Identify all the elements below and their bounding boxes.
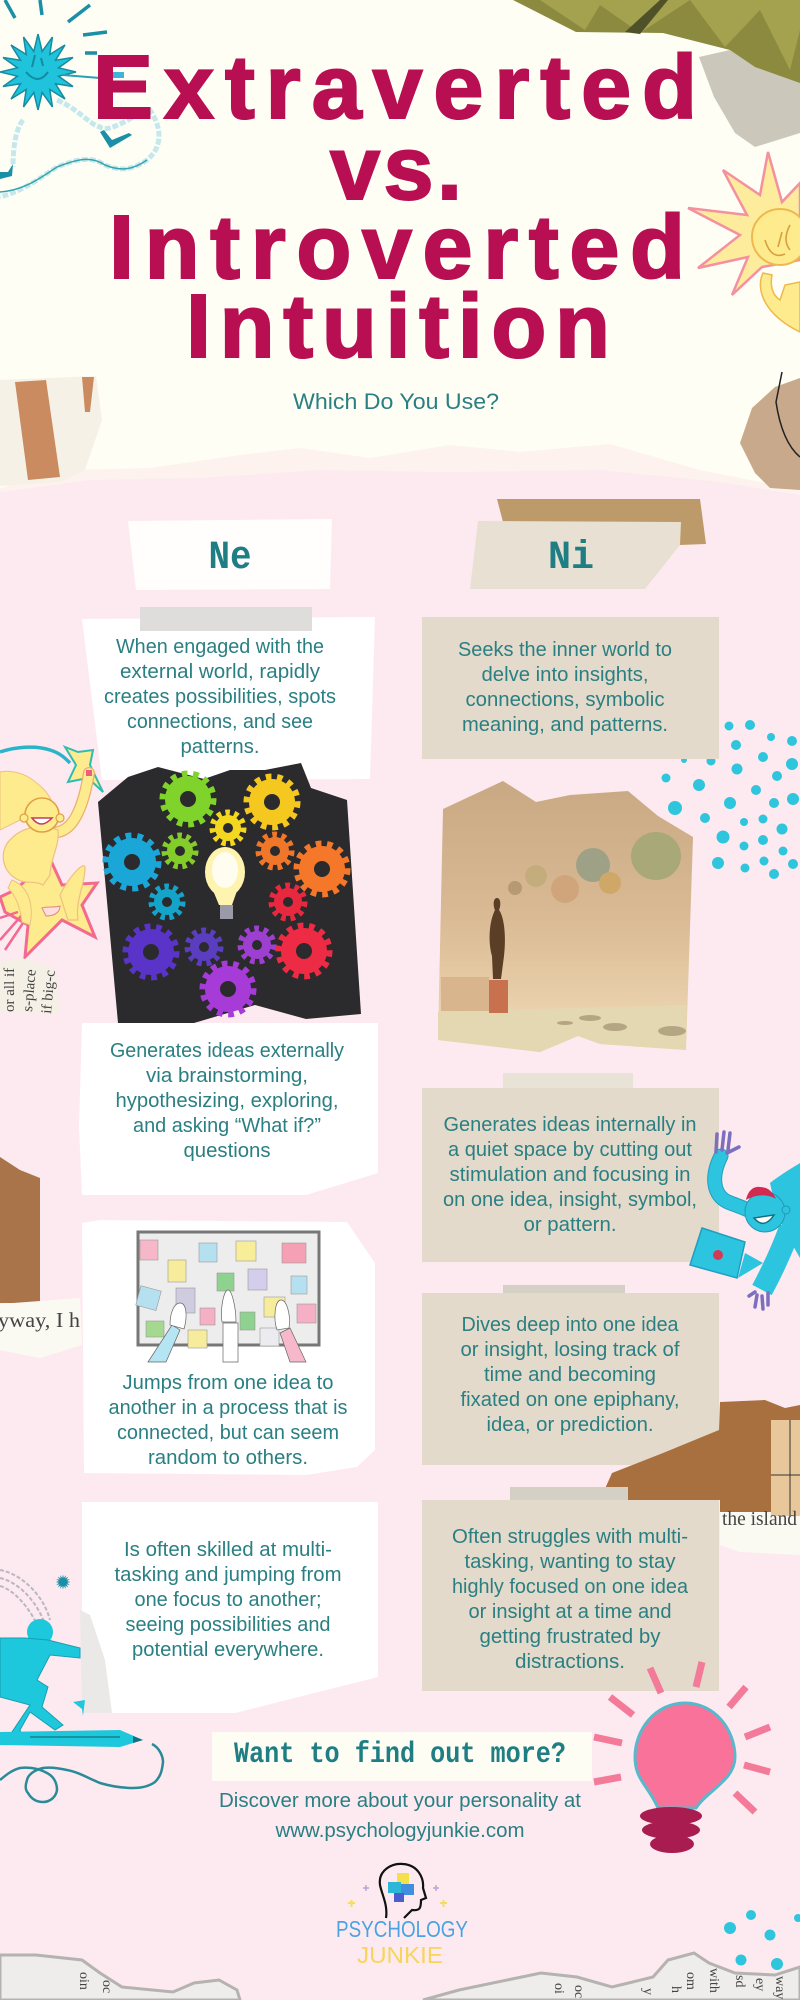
panel: Ni description 4: Often struggles with multi- — [452, 1526, 688, 1548]
panel: Ni description 2: on one idea, insight, symbol, — [443, 1189, 697, 1211]
panel: Ne description 3 with whiteboard: random to others. — [148, 1447, 308, 1469]
panel: Ne description 4: seeing possibilities and — [126, 1614, 330, 1636]
panel: Ne description 4: tasking and jumping from — [114, 1564, 342, 1586]
panel: Ni description 2: a quiet space by cutting out — [448, 1139, 692, 1161]
panel: Ne description 1 — [82, 607, 375, 780]
collage: brown torn paper with newspaper scrap, left — [0, 1157, 82, 1358]
panel: Ne description 4: Is often skilled at multi- — [124, 1539, 332, 1561]
collage: torn newspaper strip, bottom: oin — [76, 1972, 91, 1990]
title: Introverted — [109, 198, 685, 298]
title: vs. — [330, 119, 462, 219]
illustration: whiteboard with sticky notes and hands — [136, 1232, 319, 1362]
title: Intuition — [186, 277, 610, 377]
panel: Ni description 1: Seeks the inner world to — [458, 639, 672, 661]
call to action box — [212, 1732, 592, 1781]
logo: Psychology Junkie: PSYCHOLOGY — [336, 1916, 468, 1942]
panel: Ne description 2: Generates ideas externally — [110, 1040, 344, 1062]
collage: brown crumpled paper with line doodle, right — [740, 372, 800, 490]
panel: Ne description 4: one focus to another; — [134, 1589, 322, 1611]
panel: Ne description 3 with whiteboard — [82, 1220, 375, 1475]
panel: Ne description 1: patterns. — [180, 736, 260, 758]
call to action text: Discover more about your personality at — [219, 1790, 581, 1812]
panel: Ni description 3: idea, or prediction. — [486, 1414, 654, 1436]
panel: Ni description 4: or insight at a time and — [468, 1601, 672, 1623]
panel: Ni description 4: highly focused on one idea — [452, 1576, 689, 1598]
collage: brown torn paper with map and newspaper scrap, right — [600, 1400, 800, 1555]
panel: Ni description 1: meaning, and patterns. — [462, 714, 668, 736]
collage: mountain and grey torn paper, top right — [513, 0, 800, 147]
collage: torn paper with brown tape, left — [0, 376, 102, 486]
collage: torn newspaper strip, bottom: with — [706, 1968, 721, 1993]
title: Extraverted — [93, 38, 697, 138]
panel: Ni description 3: fixated on one epiphany, — [460, 1389, 680, 1411]
call to action text: www.psychologyjunkie.com — [274, 1820, 524, 1842]
panel: Ni description 3 — [422, 1285, 719, 1465]
heading tag: Ni with tape: Ni — [548, 536, 594, 581]
panel: Ni description 2: stimulation and focusing in — [450, 1164, 690, 1186]
title — [93, 38, 697, 377]
image: person with floating thought spheres — [438, 781, 693, 1052]
collage: torn newspaper strip, bottom: oc — [99, 1980, 114, 1993]
subtitle: Which Do You Use? — [293, 389, 499, 414]
header background: cream torn paper — [0, 0, 800, 500]
panel: Ni description 4: tasking, wanting to stay — [464, 1551, 676, 1573]
collage: torn newspaper strip, bottom: oc — [571, 1985, 586, 1998]
dots: blue confetti, bottom right — [724, 1910, 800, 1970]
collage: torn newspaper strip, bottom: sd — [732, 1975, 747, 1987]
panel: Ni description 1: connections, symbolic — [466, 689, 664, 711]
collage: torn newspaper strip, bottom: ey — [752, 1978, 767, 1991]
icon: pink light bulb with rays — [594, 1662, 770, 1853]
collage: newspaper scrap, left: s-place — [20, 968, 40, 1012]
logo: Psychology Junkie: JUNKIE — [357, 1942, 443, 1968]
panel: Ni description 4: distractions. — [515, 1651, 625, 1673]
panel: Ni description 3: or insight, losing track of — [460, 1339, 680, 1361]
collage: newspaper scrap, left: if big-c — [39, 969, 59, 1014]
collage: torn newspaper strip, bottom: way — [772, 1976, 787, 1999]
collage: torn newspaper strip, bottom: y — [640, 1988, 655, 1995]
panel: Ne description 1: external world, rapidly — [120, 661, 320, 683]
panel: Ni description 1: delve into insights, — [482, 664, 648, 686]
panel: Ni description 3: time and becoming — [484, 1364, 656, 1386]
panel: Ne description 1: connections, and see — [127, 711, 313, 733]
illustration: blue surfer on pencil, left — [0, 1570, 163, 1802]
panel: Ne description 3 with whiteboard: another in a process that is — [108, 1397, 348, 1419]
panel: Ni description 2: Generates ideas internally in — [444, 1114, 696, 1136]
panel: Ne description 2: and asking “What if?” — [133, 1115, 321, 1137]
panel: Ni description 2: or pattern. — [524, 1214, 616, 1236]
call to action box: Want to find out more? — [234, 1738, 566, 1772]
panel: Ni description 1 — [422, 617, 719, 759]
panel: Ne description 4: potential everywhere. — [132, 1639, 324, 1661]
dots: blue confetti, right — [662, 720, 799, 879]
panel: Ne description 1: creates possibilities, spots — [104, 686, 336, 708]
panel: Ni description 4 — [422, 1487, 719, 1691]
panel: Ne description 2: via brainstorming, — [146, 1065, 308, 1087]
collage: torn newspaper strip, bottom: om — [683, 1972, 698, 1990]
illustration: yellow monkey on star, left — [0, 747, 103, 957]
icon: yellow sun doodle, right — [688, 152, 800, 332]
panel: Ne description 3 with whiteboard: Jumps from one idea to — [122, 1372, 334, 1394]
illustration: blue monkey with laptop, right — [690, 1132, 800, 1309]
collage: brown torn paper with newspaper scrap, left: yway, I h — [0, 1308, 81, 1332]
panel: Ni description 3: Dives deep into one idea — [462, 1314, 679, 1336]
panel: Ni description 4: getting frustrated by — [480, 1626, 660, 1648]
heading tag: Ne — [128, 519, 332, 590]
panel: Ne description 1: When engaged with the — [116, 636, 324, 658]
collage: newspaper scrap, left: or all if — [2, 968, 18, 1012]
collage: torn newspaper strip, bottom — [0, 1953, 800, 2000]
collage: newspaper scrap, left — [0, 958, 60, 1014]
panel: Ne description 2 — [79, 1023, 378, 1195]
icon: blue star doodle with swirl, top left — [0, 0, 159, 197]
logo: Psychology Junkie — [336, 1864, 468, 1968]
panel: Ne description 2: hypothesizing, exploring, — [116, 1090, 338, 1112]
call to action text — [219, 1790, 581, 1842]
heading tag: Ni with tape — [470, 499, 706, 589]
collage: brown torn paper with map and newspaper scrap, right: the island — [722, 1508, 797, 1530]
panel: Ne description 3 with whiteboard: connected, but can seem — [117, 1422, 339, 1444]
image: colourful gears and light bulb — [98, 763, 361, 1023]
panel: Ni description 2 — [422, 1073, 719, 1262]
heading tag: Ne: Ne — [208, 536, 252, 581]
collage: torn newspaper strip, bottom: h — [668, 1986, 683, 1993]
panel: Ne description 2: questions — [184, 1140, 270, 1162]
collage: torn newspaper strip, bottom: oi — [551, 1983, 566, 1994]
panel: Ne description 4 — [80, 1502, 378, 1713]
